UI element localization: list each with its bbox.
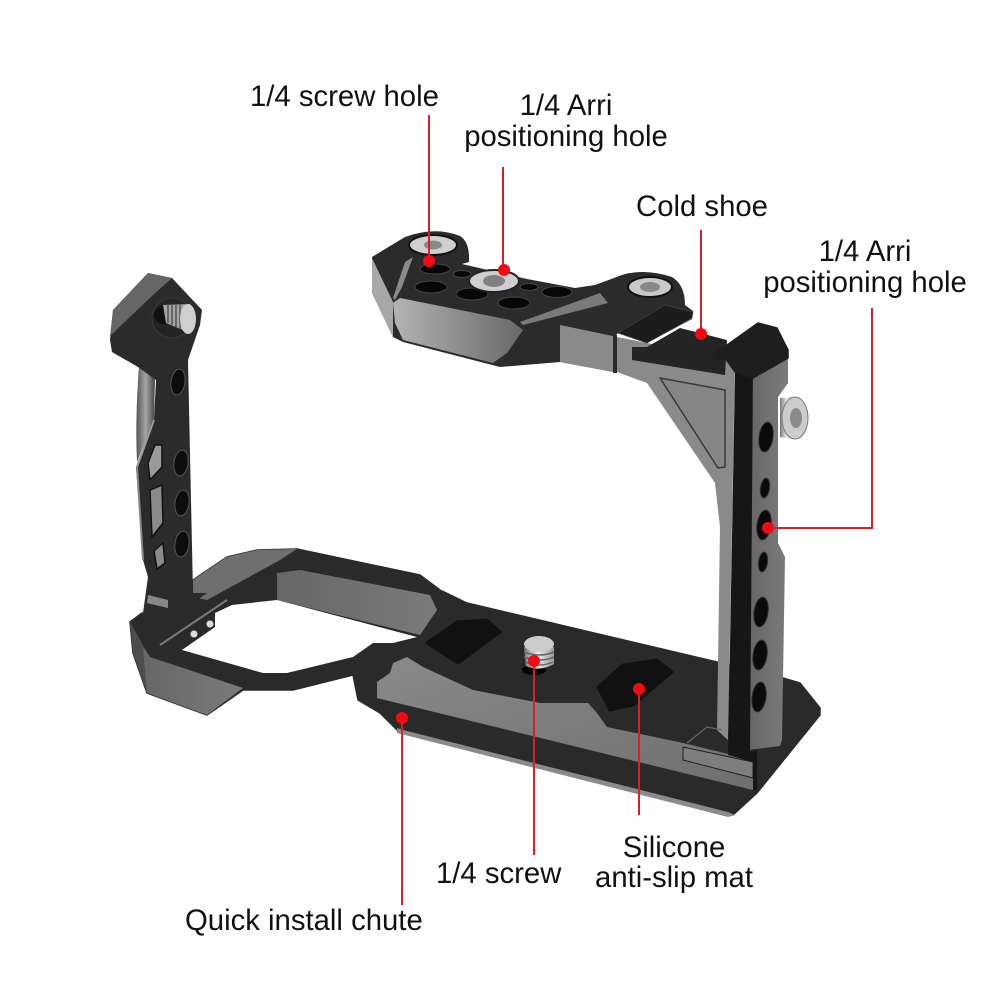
window opening xyxy=(182,600,417,673)
label: 1/4 Arri positioning hole, right: 1/4 Arri xyxy=(819,235,911,268)
silicone mat left xyxy=(427,620,500,663)
label: cold shoe xyxy=(636,190,768,340)
top plate holes xyxy=(415,264,572,309)
label: cold shoe: Cold shoe xyxy=(636,190,768,223)
label: silicone anti-slip mat: Silicone xyxy=(623,831,725,864)
camera cage product xyxy=(110,231,820,817)
label: 1/4 screw: 1/4 screw xyxy=(436,857,562,890)
label: quick install chute xyxy=(185,712,423,937)
label: silicone anti-slip mat: anti-slip mat xyxy=(595,861,753,894)
label: 1/4 screw hole xyxy=(250,80,439,267)
top plate xyxy=(372,231,693,373)
lower frame xyxy=(130,549,820,815)
post bolt xyxy=(780,397,808,439)
top plate bolts xyxy=(409,235,672,297)
silicone mat right xyxy=(598,660,672,710)
baseplate lower rim xyxy=(397,728,735,817)
side post xyxy=(617,323,808,790)
label: 1/4 screw hole: 1/4 screw hole xyxy=(250,80,439,113)
label: 1/4 Arri positioning hole, top: 1/4 Arri xyxy=(520,89,612,122)
label: 1/4 Arri positioning hole, right xyxy=(762,235,967,534)
label: 1/4 Arri positioning hole, top: positioning hole xyxy=(464,120,668,153)
baseplate grey facet xyxy=(377,657,753,790)
label: 1/4 screw xyxy=(436,655,562,890)
quarter-inch screw xyxy=(522,636,554,675)
label: 1/4 Arri positioning hole, right: positioning hole xyxy=(763,266,967,299)
label: quick install chute: Quick install chute xyxy=(185,904,423,937)
left handle arm xyxy=(110,273,207,620)
left arm screw xyxy=(152,298,196,338)
label: 1/4 Arri positioning hole, top xyxy=(464,89,668,276)
label: silicone anti-slip mat xyxy=(595,683,753,894)
